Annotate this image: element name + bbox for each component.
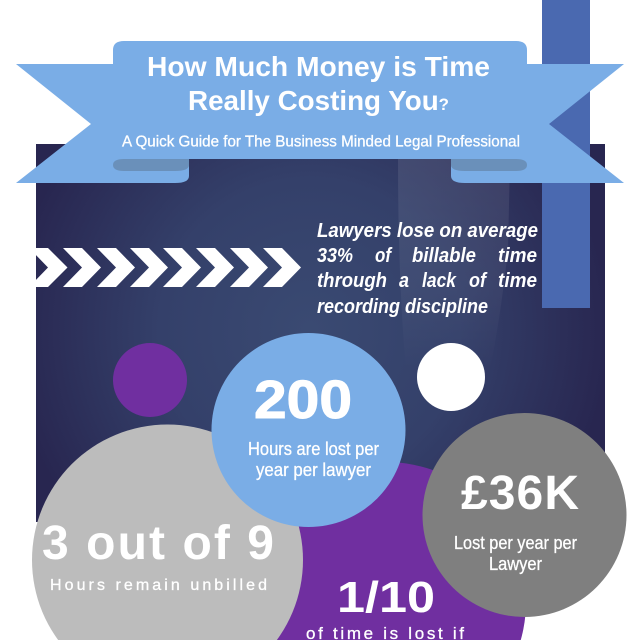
statistic text: lawyers lose 33%: 33% — [317, 245, 353, 267]
purple circle: 1/10: 1/10 — [337, 573, 435, 622]
dark grey circle: £36K — [422, 413, 626, 617]
blue circle: 200 hours: year per lawyer — [256, 460, 371, 480]
statistic text: lawyers lose 33%: time — [498, 270, 537, 292]
purple circle: 1/10 — [276, 462, 526, 640]
light grey circle: 3 out of 9 — [32, 424, 303, 640]
statistic text: lawyers lose 33%: of — [469, 270, 488, 292]
statistic text: lawyers lose 33%: Lawyers lose on average — [317, 220, 538, 242]
light grey circle: 3 out of 9: 3 out of 9 — [42, 517, 274, 570]
small white circle — [417, 343, 485, 411]
blue circle: 200 hours: Hours are lost per — [248, 439, 379, 459]
small purple circle — [113, 343, 187, 417]
statistic text: lawyers lose 33%: recording discipline — [317, 296, 488, 318]
light grey circle: 3 out of 9: Hours remain unbilled — [50, 577, 267, 594]
subtitle: A Quick Guide for The Business Minded Legal Professional — [122, 134, 520, 150]
statistic text: lawyers lose 33%: lack — [422, 270, 457, 292]
vertical blue bar — [542, 0, 590, 308]
title: How Much Money is Time — [147, 51, 490, 82]
dark grey circle: £36K: Lawyer — [489, 554, 542, 574]
ribbon banner — [16, 41, 624, 183]
dark grey circle: £36K: Lost per year per — [454, 533, 577, 553]
statistic text: lawyers lose 33%: time — [498, 245, 537, 267]
chevron arrows — [29, 248, 301, 287]
title: Really Costing You? — [188, 85, 449, 116]
blue circle: 200 hours: 200 — [254, 370, 352, 430]
statistic text: lawyers lose 33%: of — [375, 245, 393, 267]
dark background panel — [36, 144, 605, 522]
title — [147, 51, 490, 116]
statistic text: lawyers lose 33%: a — [399, 270, 409, 292]
dark grey circle: £36K: £36K — [461, 467, 579, 520]
blue circle: 200 hours — [212, 333, 406, 527]
statistic text: lawyers lose 33% — [317, 220, 538, 318]
statistic text: lawyers lose 33%: through — [317, 270, 387, 292]
statistic text: lawyers lose 33%: billable — [412, 245, 476, 267]
